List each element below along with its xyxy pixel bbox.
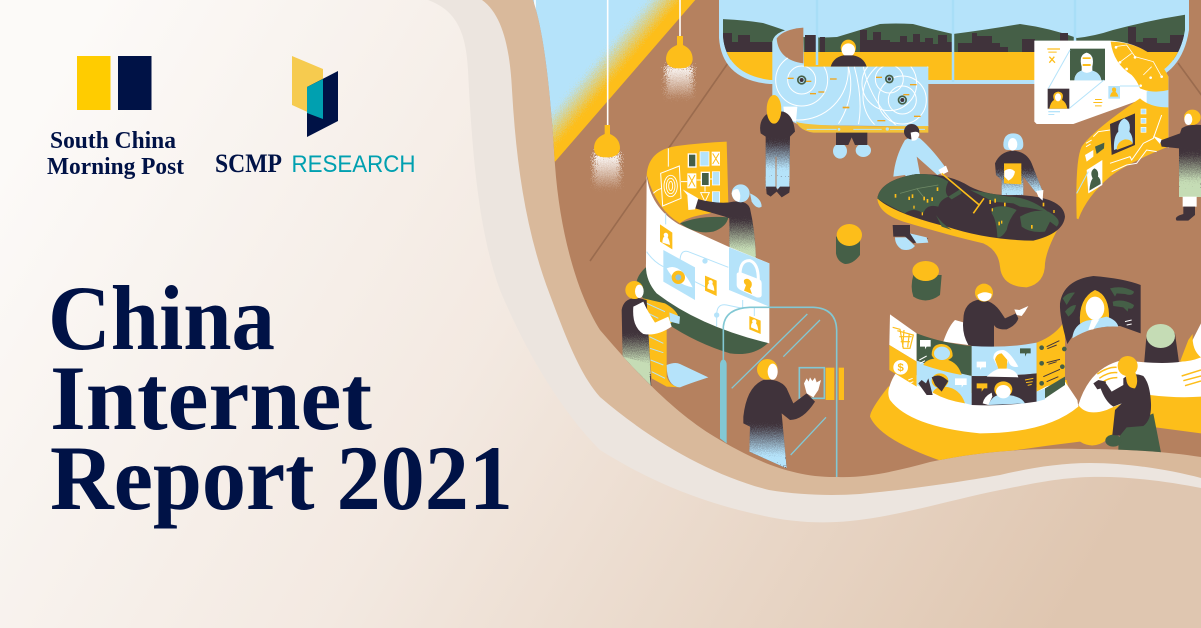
main title: China	[48, 267, 275, 369]
floor perspective lines	[590, 63, 1201, 261]
glass door with hand scanner	[720, 307, 844, 478]
shopping and video call ribbon screen	[889, 314, 1067, 405]
white security wall	[646, 175, 769, 343]
top left illustration area	[507, 0, 942, 197]
SCMP Research logo	[215, 56, 416, 178]
South China Morning Post logo: Morning Post	[47, 154, 184, 180]
brown room floor	[533, 0, 1201, 477]
center and right illustration area	[877, 41, 1201, 287]
shopping and video call ribbon screen: $	[898, 362, 905, 374]
South China Morning Post logo	[47, 56, 184, 180]
main title: Report 2021	[50, 427, 513, 529]
solid yellow window edge	[548, 0, 698, 162]
white reception counter	[888, 368, 1078, 433]
yellow edge on right counter	[1180, 334, 1201, 362]
dark green bench	[680, 217, 728, 232]
man presenting behind counter	[943, 284, 1028, 347]
large window with skyline	[719, 0, 1190, 92]
woman with blue hair and folder	[995, 133, 1044, 200]
woman with long hair holding tablet	[760, 95, 798, 198]
right white dashboard panel	[1034, 41, 1168, 148]
man holding striped yellow scroll	[622, 281, 708, 388]
person right pointing at screen	[1153, 110, 1201, 221]
man in blue shirt at table	[893, 124, 948, 250]
weather map screen	[772, 28, 928, 133]
main title: Internet	[50, 347, 372, 449]
woman at fingerprint scanner	[683, 184, 762, 262]
stool near center	[836, 224, 862, 264]
seated woman	[1093, 356, 1161, 453]
counter writing lines	[1097, 367, 1201, 386]
short white cord	[534, 0, 536, 10]
side window with sunlight	[533, 0, 695, 162]
pendant lamp left	[594, 0, 620, 189]
right curved yellow screen	[1076, 98, 1168, 219]
world map table	[877, 173, 1065, 287]
left illustration area	[617, 142, 862, 478]
fingerprint panel	[647, 142, 728, 223]
white right counter	[1078, 323, 1201, 412]
bottom right illustration area	[870, 261, 1201, 462]
light curved band	[428, 0, 1201, 522]
tan curved band	[482, 0, 1201, 495]
pendant lamp right	[666, 0, 693, 99]
stool near table	[912, 261, 942, 300]
SCMP Research logo: SCMP	[215, 149, 282, 178]
security wall green base	[636, 263, 768, 354]
main title	[48, 267, 513, 529]
dark video panel with woman	[1060, 276, 1141, 344]
dark stool with sage top	[1144, 324, 1179, 365]
illustration: smart office room	[507, 0, 1201, 478]
man behind weather map	[831, 40, 871, 159]
SCMP Research logo: RESEARCH	[292, 151, 416, 178]
yellow counter base	[870, 380, 1201, 462]
South China Morning Post logo: South China	[50, 128, 176, 154]
